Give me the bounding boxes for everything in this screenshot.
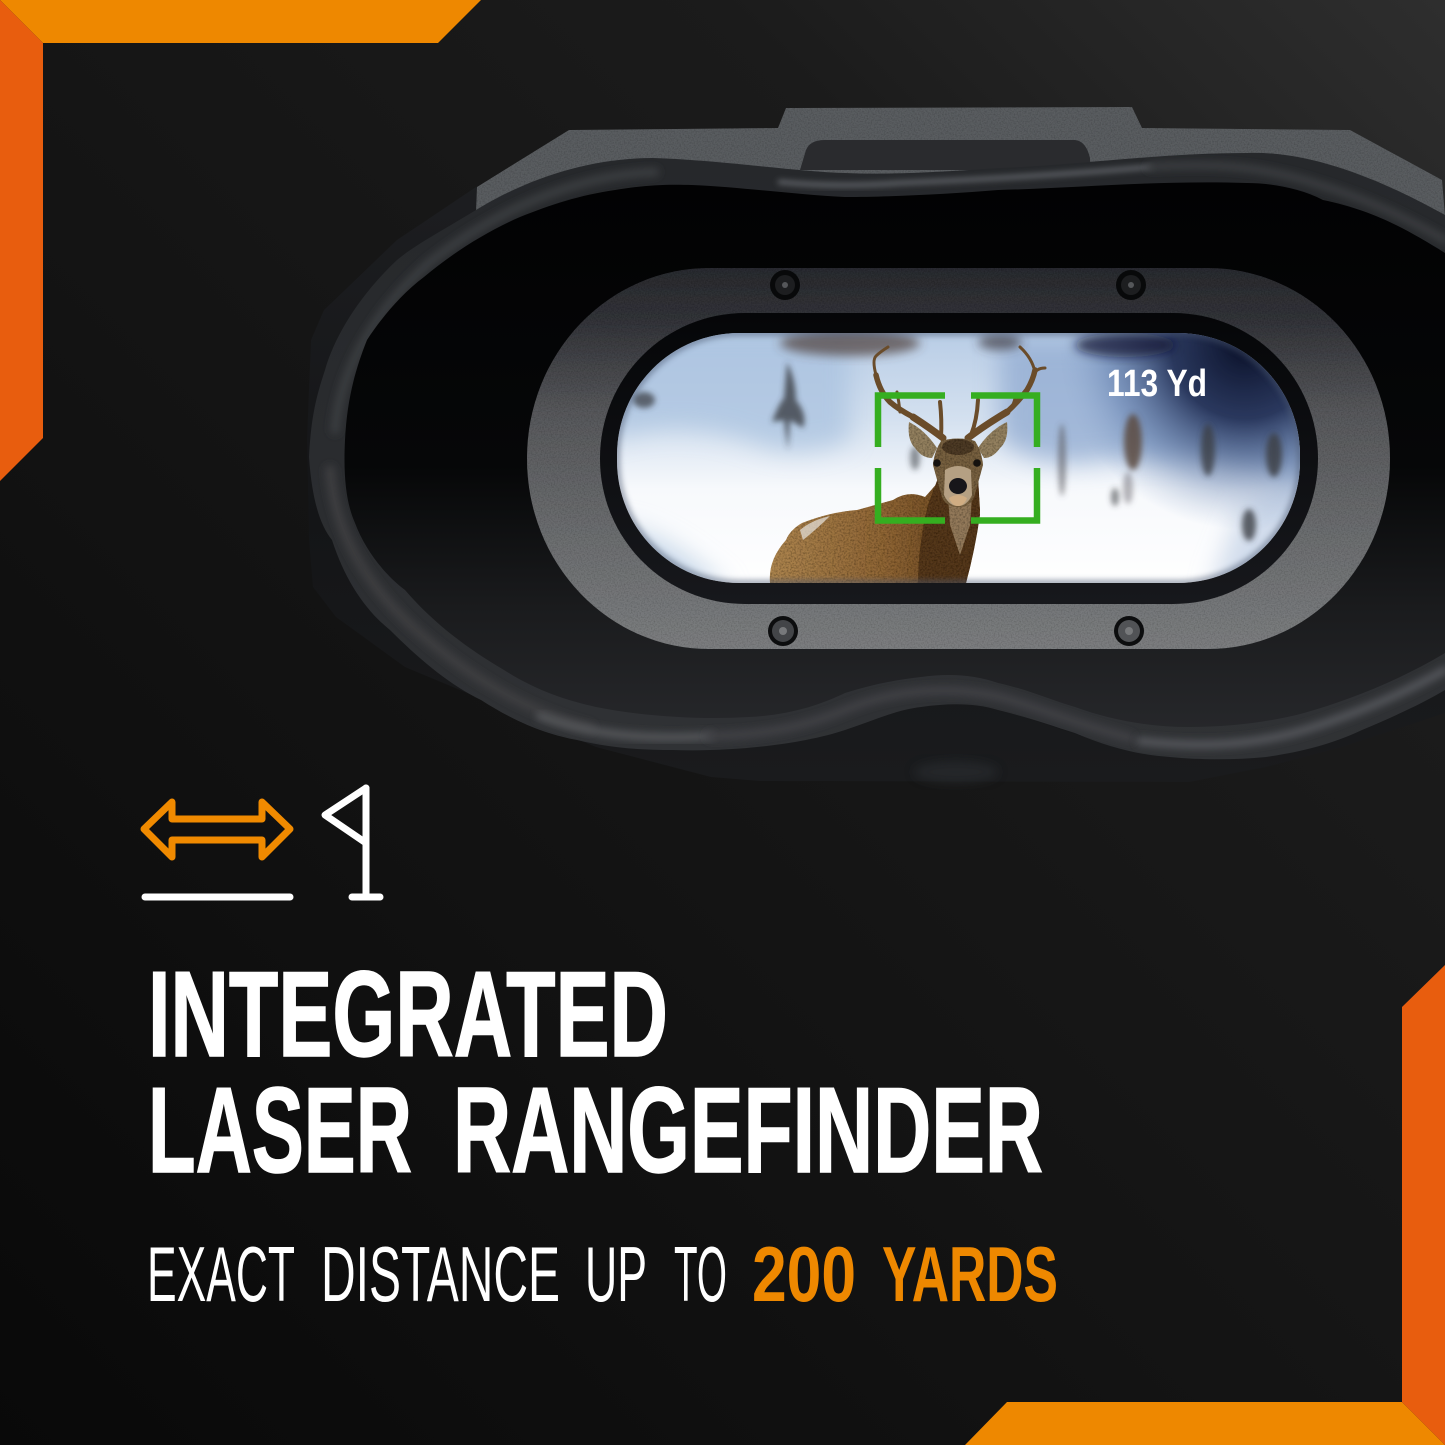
screw top-left [770,270,800,300]
rubber eyecup rim [309,153,1445,759]
forehead tuft [942,439,974,455]
muzzle [944,466,972,506]
product: night vision binocular eyepiece [307,107,1445,783]
subtitle: DISTANCE [321,1230,560,1318]
outer shell [307,187,1445,782]
body [770,478,980,583]
orange double arrow [144,802,290,857]
eyes [933,459,941,467]
title [148,946,1043,1198]
screw top-right [1116,270,1146,300]
stag [770,347,1045,583]
flag [325,788,380,897]
subtitle: YARDS [882,1230,1058,1318]
corner accent: top-left [0,0,481,481]
rim highlights [330,165,1445,745]
ears [909,422,937,458]
subtitle: EXACT [147,1230,295,1318]
subtitle: UP [585,1230,647,1318]
corner accent: bottom-right [965,965,1445,1445]
neck dark mane [918,478,980,583]
dark vignette [1080,333,1300,522]
icon: range arrow and flag [144,788,380,897]
snow background [610,325,1310,590]
subtitle [147,1230,1058,1318]
neck front [948,501,972,555]
viewfinder screen: snowy scene with stag [610,325,1310,590]
blurred trees and shrubs [633,330,1282,541]
screw bottom-left [768,616,798,646]
ground line [145,894,290,900]
snow patch on back [800,516,830,540]
subtitle: TO [674,1230,727,1318]
distance readout: 113 Yd [1107,363,1207,405]
light patch below eyecup [914,761,998,783]
antlers [874,347,1045,438]
nose [949,478,967,494]
device housing [476,107,1445,300]
green target brackets [878,396,1037,520]
title: LASER [148,1062,412,1198]
title: RANGEFINDER [453,1062,1043,1198]
eyecup cavity [344,182,1445,727]
title: INTEGRATED [148,946,668,1082]
housing latch [800,140,1090,170]
head [933,438,983,507]
soft screen edge [617,333,1300,583]
inner black ring [600,313,1318,604]
snow shading [610,330,1310,590]
subtitle: 200 [752,1230,856,1318]
screw bottom-right [1114,616,1144,646]
metal plate [527,268,1390,649]
